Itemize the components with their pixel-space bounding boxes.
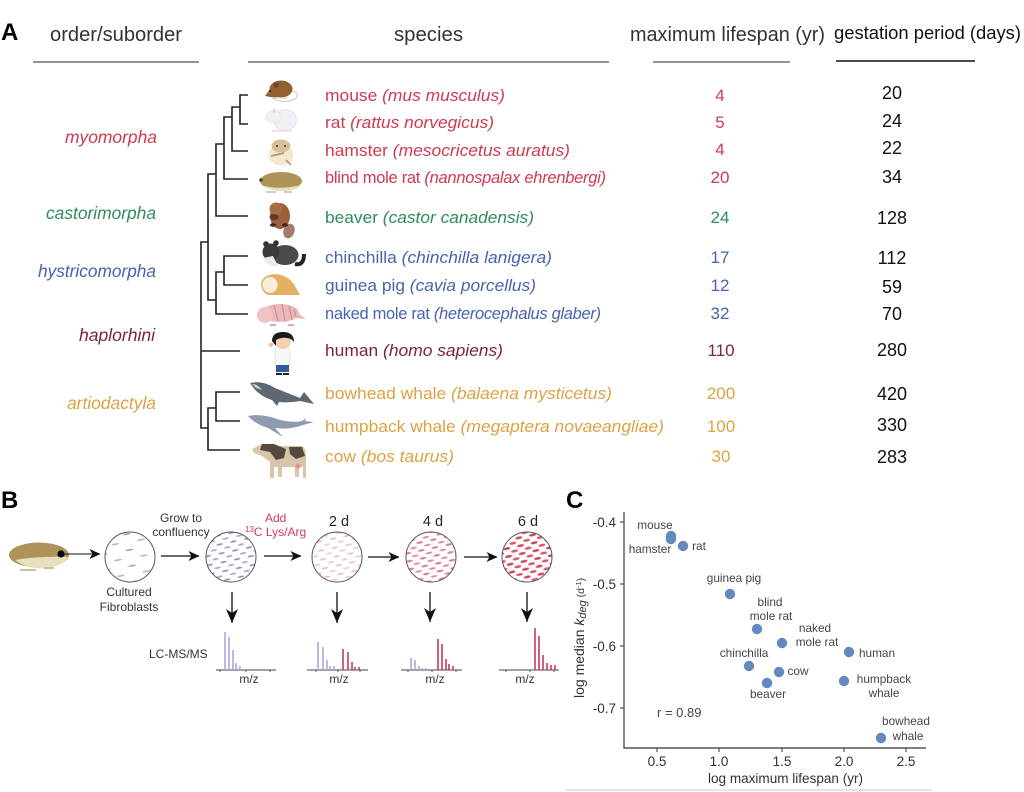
point labels: mole rat (796, 635, 839, 649)
row: bowhead whale (325, 384, 735, 403)
panel A: phylogeny table (1, 19, 1021, 478)
row: blind mole rat (325, 168, 729, 187)
row: rat: 5 (715, 113, 725, 132)
row: naked mole rat (325, 304, 729, 323)
row: guinea pig (325, 276, 729, 295)
panel label A: A (1, 19, 18, 46)
order: haplorhini: haplorhini (79, 325, 156, 345)
point labels: whale (868, 686, 900, 700)
cell dish: 6 d (502, 514, 552, 582)
gestation period values: 34 (882, 167, 902, 187)
correlation label: r = 0.89 (657, 705, 701, 720)
point labels: whale (892, 729, 924, 743)
y axis title: log median k (571, 619, 587, 698)
x axis tick labels: 1.5 (773, 754, 791, 769)
row: cow: cow (bos taurus) (325, 448, 454, 466)
arrow: grow (161, 555, 199, 557)
y axis tick labels: -0.5 (593, 577, 616, 592)
y axis tick labels: -0.7 (593, 701, 616, 716)
arrows: dishes to spectra (232, 592, 527, 623)
point labels: chinchilla (720, 646, 769, 660)
x axis tick labels: 2.0 (835, 754, 853, 769)
point labels: humpback (857, 672, 911, 686)
row: guinea pig: guinea pig (cavia porcellus) (325, 277, 536, 295)
x axis tick labels: 0.5 (648, 754, 666, 769)
row: hamster (325, 140, 725, 160)
row: humpback whale: humpback whale (megaptera novaeangliae) (325, 418, 664, 436)
spectrum: 4 d (401, 639, 462, 686)
row: cow: 30 (712, 447, 730, 466)
point labels: naked (799, 621, 831, 635)
data points (666, 531, 886, 743)
y axis tick labels: -0.4 (593, 515, 616, 530)
point labels: cow (788, 664, 809, 678)
icon: mole rat with biopsy point (9, 542, 69, 570)
column header: species: species (394, 24, 463, 46)
spectrum: day 0 (216, 632, 276, 686)
arrow: 4 d to 6 d (464, 556, 497, 558)
order: artiodactyla: artiodactyla (67, 393, 156, 413)
point labels: mole rat (750, 609, 793, 623)
label: grow to confluency (152, 511, 210, 539)
label: grow to confluency: confluency (152, 525, 210, 539)
row: human: human (homo sapiens) (325, 342, 503, 360)
gestation period values: 280 (877, 340, 907, 360)
label: add 13C Lys/Arg: C Lys/Arg (254, 525, 306, 539)
row: chinchilla: 17 (711, 248, 729, 267)
column header: order/suborder: order/suborder (50, 24, 182, 46)
cell dish: 4 d (406, 514, 456, 582)
order: myomorpha: myomorpha (65, 127, 157, 147)
x axis title: log maximum lifespan (yr) (708, 771, 863, 786)
x axis tick labels: 2.5 (897, 754, 915, 769)
label: add 13C Lys/Arg: Add (265, 511, 286, 525)
row: chinchilla: chinchilla (chinchilla lanigera) (325, 249, 552, 267)
point labels: blind (758, 595, 782, 609)
icon: blind mole rat (259, 172, 302, 192)
label: add 13C Lys/Arg (245, 511, 306, 539)
order labels (38, 127, 157, 413)
gestation period values: 330 (877, 415, 907, 435)
cell dish: 4 d: 4 d (423, 514, 443, 530)
panel B: SILAC workflow (1, 487, 559, 686)
gestation period values: 128 (877, 208, 907, 228)
y axis tick labels (593, 515, 616, 716)
row: rat (325, 113, 725, 132)
row: beaver (325, 208, 729, 227)
spectrum: 2 d (307, 642, 368, 686)
panel label C: C (566, 487, 583, 514)
label: cultured fibroblasts: Cultured (106, 585, 152, 599)
cell dish: 2 d (312, 514, 362, 582)
row: blind mole rat: 20 (711, 168, 729, 187)
icon: rat (266, 109, 296, 131)
icon: naked mole rat (257, 304, 306, 325)
spectrum: 6 d: m/z (515, 672, 535, 686)
point labels: hamster (629, 542, 671, 556)
row: naked mole rat: 32 (711, 304, 729, 323)
row: cow (325, 447, 730, 466)
gestation period values: 22 (882, 138, 902, 158)
row: hamster: 4 (715, 140, 725, 159)
gestation period values: 70 (882, 304, 902, 324)
arrow: 2 d to 4 d (368, 556, 399, 558)
icon: hamster (268, 140, 294, 166)
icon: human scientist (269, 332, 294, 375)
row: mouse: 4 (715, 86, 725, 105)
icon: mouse (265, 80, 297, 102)
x axis tick labels (648, 754, 915, 769)
spectrum: 2 d: m/z (329, 672, 349, 686)
order: hystricomorpha: hystricomorpha (38, 261, 156, 281)
icon: cow (252, 444, 306, 478)
row: chinchilla (325, 248, 729, 267)
arrow: animal to fibroblasts (61, 553, 100, 555)
y axis tick labels: -0.6 (593, 639, 616, 654)
icon: humpback whale (248, 415, 314, 437)
y axis title: -1 (574, 581, 583, 588)
y axis title: ) (575, 578, 587, 581)
column header: maximum lifespan: maximum lifespan (yr) (630, 24, 825, 46)
row: blind mole rat: blind mole rat (nannospalax ehrenbergi) (325, 169, 606, 187)
icon: bowhead whale (250, 382, 314, 406)
label: LC-MS/MS: LC-MS/MS (149, 647, 208, 661)
gestation period values: 420 (877, 384, 907, 404)
row: hamster: hamster (mesocricetus auratus) (325, 142, 570, 160)
point labels: beaver (750, 687, 786, 701)
arrow: add label (264, 555, 301, 557)
gestation period values: 20 (882, 83, 902, 103)
cell dish: cultured fibroblasts (105, 532, 155, 582)
row: bowhead whale: bowhead whale (balaena mysticetus) (325, 385, 612, 403)
y axis title: deg (577, 599, 589, 619)
species rows (325, 86, 735, 466)
row: mouse (325, 86, 725, 105)
row: rat: rat (rattus norvegicus) (325, 114, 494, 132)
label: cultured fibroblasts (100, 585, 158, 614)
row: mouse: mouse (mus musculus) (325, 87, 505, 105)
point labels: guinea pig (707, 571, 761, 585)
gestation period values (877, 83, 907, 467)
row: humpback whale: 100 (707, 417, 735, 436)
label: grow to confluency: Grow to (160, 511, 202, 525)
row: beaver: 24 (711, 208, 729, 227)
gestation period values: 24 (882, 111, 902, 131)
panel C: scatter plot (566, 487, 932, 790)
icon: chinchilla (262, 240, 304, 266)
x axis tick labels: 1.0 (710, 754, 728, 769)
row: naked mole rat: naked mole rat (heterocephalus glaber) (325, 305, 601, 323)
row: bowhead whale: 200 (707, 384, 735, 403)
spectrum: 4 d: m/z (425, 672, 445, 686)
point labels: mouse (637, 518, 673, 532)
icon: guinea pig (261, 274, 300, 295)
row: human (325, 341, 735, 360)
point labels: human (859, 646, 895, 660)
y axis title: (d (575, 588, 587, 600)
gestation period values: 283 (877, 447, 907, 467)
gestation period values: 59 (882, 277, 902, 297)
row: human: 110 (707, 341, 735, 360)
phylogenetic tree (201, 95, 248, 450)
row: guinea pig: 12 (711, 276, 729, 295)
label: add 13C Lys/Arg: 13 (245, 525, 254, 534)
spectrum: 6 d (499, 628, 559, 686)
column header: gestation period: gestation period (days) (834, 22, 1021, 43)
cell dish: 2 d: 2 d (329, 514, 349, 530)
label: cultured fibroblasts: Fibroblasts (100, 600, 158, 614)
axes (620, 512, 926, 752)
spectrum: day 0: m/z (239, 672, 259, 686)
panel label B: B (1, 487, 18, 514)
cell dish: 6 d: 6 d (518, 514, 538, 530)
gestation period values: 112 (878, 248, 906, 268)
point labels: bowhead (882, 714, 930, 728)
point labels (629, 518, 930, 743)
cell dish: confluent (206, 532, 256, 582)
point labels: rat (692, 539, 707, 553)
icon: beaver (270, 202, 297, 240)
order: castorimorpha: castorimorpha (46, 203, 156, 223)
row: beaver: beaver (castor canadensis) (325, 209, 534, 227)
